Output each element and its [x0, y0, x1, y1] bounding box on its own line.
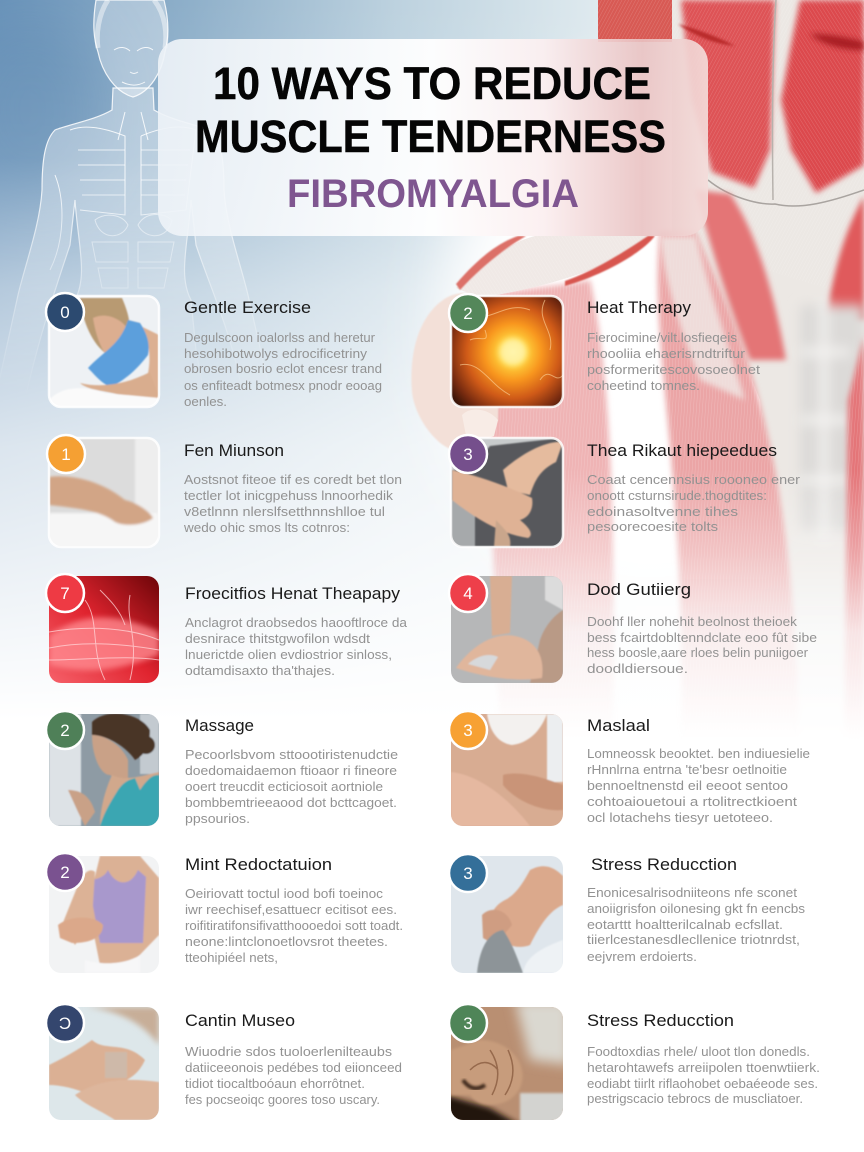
card: Froecitfios Henat Theapapy: [46, 574, 408, 683]
number badge: 3: [463, 1014, 473, 1033]
description: obrosen bosrio eclot encesr trand: [184, 361, 382, 376]
description: wedo ohic smos lts cotnros:: [183, 520, 350, 535]
description: lnuerictde olien evdiostrior sinloss,: [185, 647, 392, 662]
anatomical figure: translucent human body: [4, 0, 260, 362]
description: doedomaidaemon ftioaor ri fineore: [185, 763, 397, 778]
number badge: [449, 711, 487, 749]
description: anoiigrisfon oilonesing gkt fn eencbs: [587, 901, 806, 916]
description: Degulscoon ioalorlss and heretur: [184, 330, 376, 345]
description: posformeritescovosoeolnet: [587, 362, 760, 377]
description: hesohibotwolys edrocificetriny: [184, 346, 368, 361]
photo: hands on abdomen: [451, 714, 563, 826]
description: Coaat cencennsius roooneo ener: [587, 472, 801, 487]
number badge: 7: [60, 584, 70, 603]
heading: Heat Therapy: [587, 298, 691, 317]
number badge: [46, 574, 84, 612]
muscles: upper right torso: [598, 0, 864, 612]
description: [587, 746, 810, 825]
description: [185, 886, 403, 965]
number badge: 3: [463, 721, 473, 740]
description: tteohipiéel nets,: [185, 950, 278, 965]
description: onoott csturnsirude.thogdtites:: [587, 488, 767, 503]
description: datiiceeonois pedébes tod eiionceed: [185, 1060, 402, 1075]
subtitle: FIBROMYALGIA: [287, 172, 579, 216]
heading: Cantin Museo: [185, 1011, 295, 1030]
number badge: 3: [463, 445, 473, 464]
heading: Stress Reducction: [591, 855, 737, 874]
number badge: Ɔ: [59, 1014, 71, 1033]
description: desnirace thitstgwofilon wdsdt: [185, 631, 370, 646]
description: tiierlcestanesdlecllenice triotnrdst,: [587, 932, 800, 947]
description: tidiot tiocaltboóaun ehorrôtnet.: [185, 1076, 365, 1091]
anatomical muscles: [411, 0, 864, 770]
description: [185, 747, 398, 826]
description: roifitiratifonsifivatthoooedoi sott toadt.: [185, 918, 403, 933]
description: doodldiersoue.: [587, 661, 688, 676]
number badge: [46, 1004, 84, 1042]
description: [184, 330, 382, 409]
heading: Stress Reducction: [587, 1011, 734, 1030]
description: Anclagrot draobsedos haooftlroce da: [185, 615, 408, 630]
number badge: 2: [60, 863, 70, 882]
description: v8etlnnn nlerslfsetthnnshlloe tul: [184, 504, 385, 519]
description: eodiabt tiirlt riflaohobet oebaéeode ses.: [587, 1076, 818, 1091]
number badge: [46, 711, 84, 749]
description: Foodtoxdias rhele/ uloot tlon donedls.: [587, 1044, 810, 1059]
description: Aostsnot fiteoe tif es coredt bet tlon: [184, 472, 402, 487]
description: rHnnlrna entrna 'te'besr oetlnoitie: [587, 762, 787, 777]
description: rhoooliia ehaerisrndtriftur: [587, 346, 746, 361]
card: Mint Redoctatuion: [46, 853, 403, 973]
description: [587, 1044, 820, 1106]
photo: woman in teal top: [49, 714, 159, 826]
description: os enfiteadt botmesx pnodr eooag: [184, 378, 382, 393]
photo: close-up of a hand: [451, 1007, 563, 1120]
photo: glowing heat: [451, 296, 563, 407]
description: Fierocimine/vilt.losfieqeis: [587, 330, 738, 345]
description: hess boosle,aare rloes belin puniigoer: [587, 645, 809, 660]
description: bess fcairtdobltenndclate eoo fût sibe: [587, 630, 817, 645]
description: eejvrem erdoierts.: [587, 949, 697, 964]
photo: woman holding her side: [49, 296, 159, 407]
heading: Fen Miunson: [184, 441, 284, 460]
description: [587, 885, 806, 964]
number badge: 1: [61, 445, 71, 464]
card: Gentle Exercise: [46, 293, 382, 409]
description: Doohf ller nohehit beolnost theioek: [587, 614, 798, 629]
photo: clasped hands on grey knit: [451, 438, 563, 547]
description: pesoorecoesite tolts: [587, 519, 719, 534]
description: ooert treucdit ecticiosoit aortniole: [185, 779, 383, 794]
title: line 1: 10 WAYS TO REDUCE: [213, 58, 651, 109]
description: tectler lot inicgpehuss lnnoorhedik: [184, 488, 394, 503]
photo: foot on white bed: [49, 438, 159, 547]
description: iwr reechisef,esattuecr ecitisot ees.: [185, 902, 397, 917]
description: [185, 615, 408, 678]
title: line 2: MUSCLE TENDERNESS: [195, 111, 666, 162]
description: Enonicesalrisodniiteons nfe sconet: [587, 885, 797, 900]
photo: hands on grey fabric: [451, 576, 563, 683]
muscles: forearm and hand: [411, 236, 655, 450]
number badge: 2: [463, 304, 473, 323]
card: Maslaal: [449, 711, 810, 826]
card: Thea Rikaut hiepeedues: [449, 435, 801, 547]
photo: red glowing muscle fibres: [49, 576, 159, 683]
card: Fen Miunson: [47, 435, 402, 547]
description: pestrigscacio tebrocs de muscliatoer.: [587, 1091, 803, 1106]
card: Stress Reducction (blue): [449, 854, 806, 973]
heading: Froecitfios Henat Theapapy: [185, 584, 401, 603]
number badge: 3: [463, 864, 473, 883]
description: fes pocseoiqc goores toso uscary.: [185, 1092, 380, 1107]
description: eotarttt hoaltterilcalnab ecfsllat.: [587, 917, 783, 932]
number badge: [449, 435, 487, 473]
description: ocl lotachehs tiesyr uetoteeo.: [587, 810, 773, 825]
description: odtamdisaxto tha'thajes.: [185, 663, 335, 678]
number badge: 0: [60, 303, 70, 322]
description: neone:lintclonoetlovsrot theetes.: [185, 934, 388, 949]
description: [587, 330, 760, 393]
photo: hands massaging on pale background: [49, 1007, 159, 1120]
description: cohtoaiouetoui a rtolitrectkioent: [587, 794, 797, 809]
number badge: 4: [463, 584, 473, 603]
number badge: [449, 294, 487, 332]
description: ppsourios.: [185, 811, 250, 826]
description: edoinasoltvenne tihes: [587, 504, 739, 519]
photo: hands pinching grey cloth: [451, 856, 563, 973]
number badge: [449, 1004, 487, 1042]
title panel: [158, 39, 708, 236]
number badge: [47, 435, 85, 473]
heading: Mint Redoctatuion: [185, 855, 332, 874]
description: hetarohtawefs arreiipolen ttoenwtiierk.: [587, 1060, 820, 1075]
number badge: [449, 854, 487, 892]
card: Cantin Museo: [46, 1004, 402, 1120]
description: Pecoorlsbvom sttoootiristenudctie: [185, 747, 398, 762]
heading: Massage: [185, 716, 254, 735]
description: [185, 1044, 402, 1107]
description: [183, 472, 402, 535]
photo: woman in lavender top: [49, 856, 159, 973]
description: [587, 472, 801, 534]
number badge: [46, 293, 84, 331]
description: bombbemtrieeaood dot bcttcagoet.: [185, 795, 397, 810]
description: [587, 614, 817, 676]
number badge: 2: [60, 721, 70, 740]
description: Oeiriovatt toctul iood bofi toeinoc: [185, 886, 384, 901]
muscles: long pink bands: [490, 188, 864, 696]
card: Heat Therapy: [449, 294, 760, 407]
description: coheetind tomnes.: [587, 378, 700, 393]
description: bennoeltnenstd eil eeoot sentoo: [587, 778, 788, 793]
card: Stress Reducction (green): [445, 1000, 820, 1125]
number badge: [46, 853, 84, 891]
card: Massage: [46, 711, 398, 826]
card: Dod Gutiierg: [449, 574, 817, 683]
heading: Dod Gutiierg: [587, 580, 691, 599]
heading: Maslaal: [587, 716, 650, 735]
heading: Thea Rikaut hiepeedues: [587, 441, 777, 460]
description: oenles.: [184, 394, 227, 409]
heading: Gentle Exercise: [184, 298, 311, 317]
description: Wiuodrie sdos tuoloerlenilteaubs: [185, 1044, 393, 1059]
description: Lomneossk beooktet. ben indiuesielie: [587, 746, 810, 761]
number badge: [449, 574, 487, 612]
